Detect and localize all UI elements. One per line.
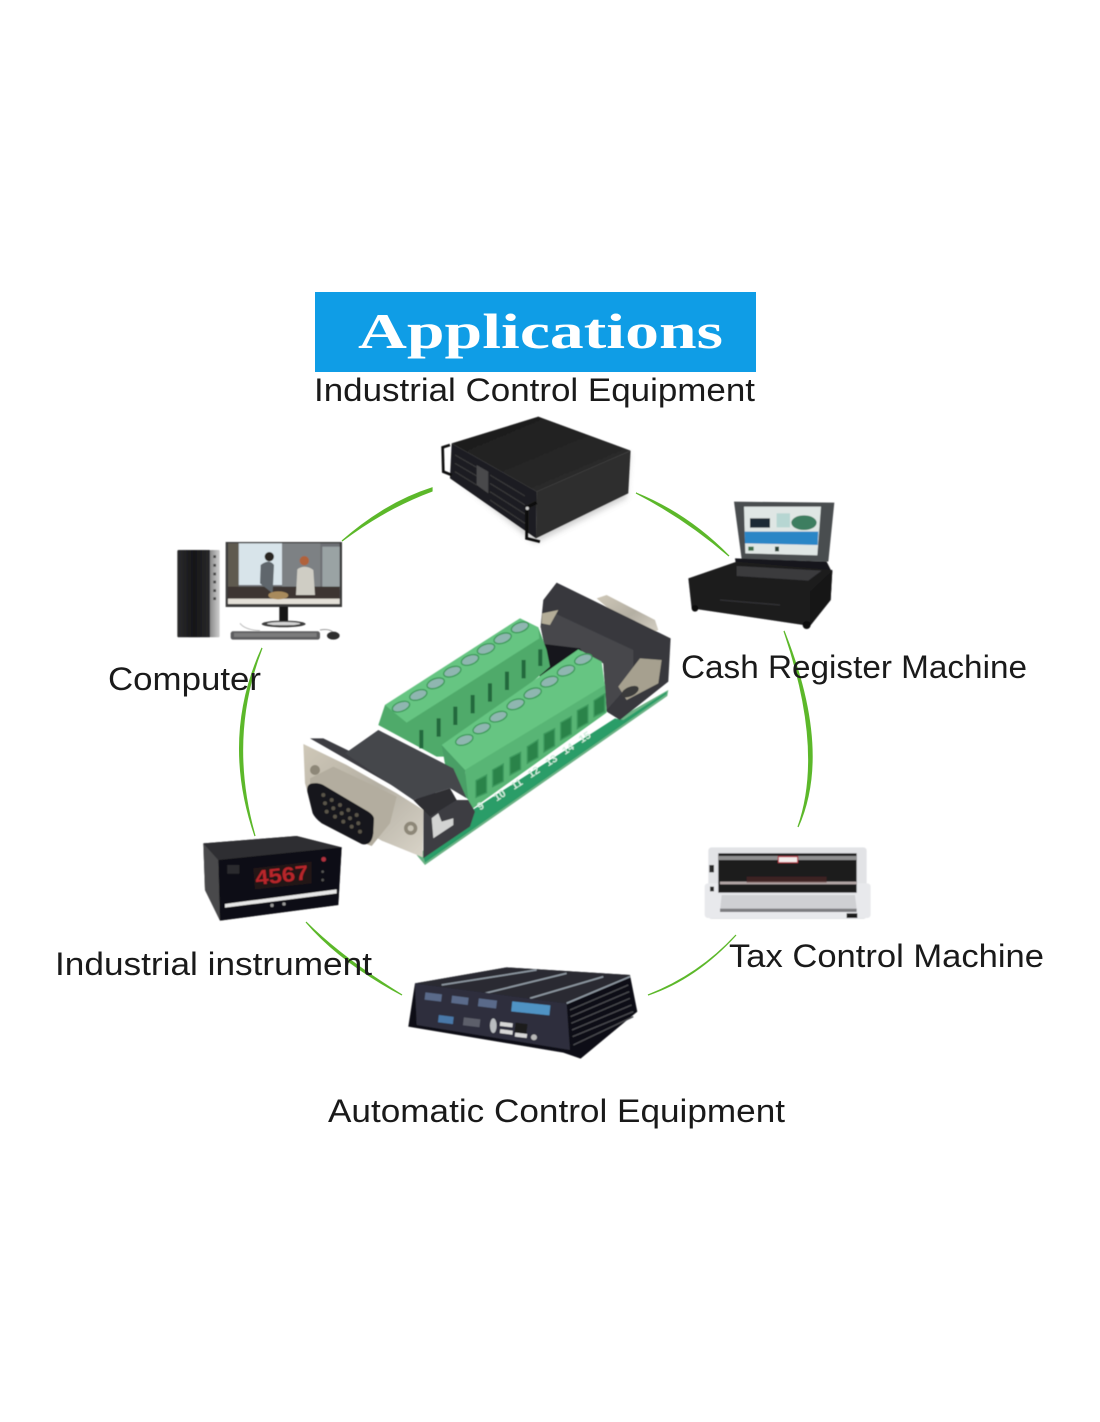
pin numbers on board: 14 [560, 741, 577, 757]
label: Cash Register Machine: Cash Register Machine [681, 649, 1027, 685]
pin numbers on board: 11 [509, 776, 525, 792]
front VGA connector [303, 730, 475, 858]
front terminal block [442, 649, 607, 809]
title banner [315, 292, 756, 372]
label: Computer: Computer [108, 661, 261, 697]
label: Industrial Control Equipment: Industrial Control Equipment [314, 372, 755, 408]
pin numbers on board: 9 [475, 800, 487, 813]
circuit board [417, 690, 668, 865]
icon: rugged laptop cash register [688, 502, 834, 629]
title banner: Applications [358, 303, 723, 359]
icon: industrial control server [443, 417, 631, 543]
rear terminal block [378, 618, 550, 757]
pin numbers on board: 15 [577, 729, 593, 746]
pin numbers on board: 13 [543, 753, 560, 769]
stand [262, 607, 306, 627]
label: Automatic Control Equipment: Automatic Control Equipment [328, 1093, 785, 1129]
monitor [226, 542, 342, 607]
pin numbers on board: 10 [492, 788, 508, 804]
pin numbers on board [475, 729, 593, 813]
tower [177, 550, 220, 637]
label: Industrial instrument: Industrial instrument [55, 946, 372, 982]
icon: industrial instrument panel [203, 836, 342, 921]
green ring arcs [240, 488, 812, 995]
label: Tax Control Machine: Tax Control Machine [729, 938, 1044, 974]
icon: desktop computer [177, 542, 342, 640]
red LED readout: 4567 [254, 862, 310, 890]
icon: tax control printer [705, 847, 871, 919]
rear connector [537, 583, 671, 720]
pin numbers on board: 12 [526, 764, 542, 781]
connector: DB15 terminal breakout board [303, 583, 671, 865]
icon: automatic control fanless box [408, 967, 637, 1059]
keyboard and mouse [231, 623, 340, 640]
